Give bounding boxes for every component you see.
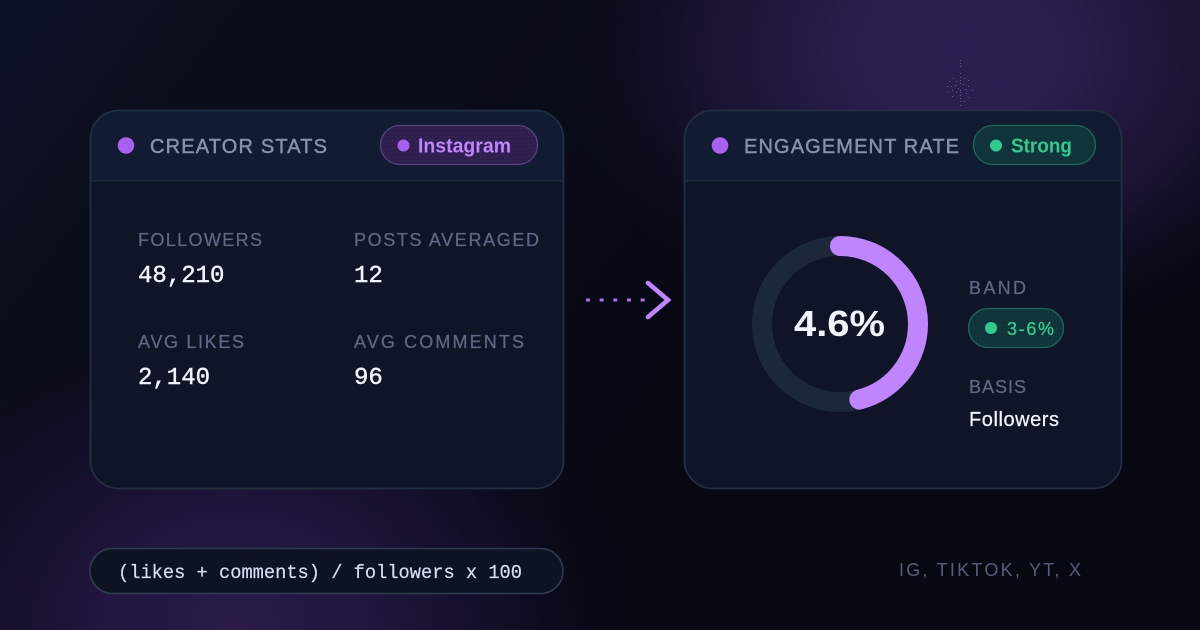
stat: followers bbox=[138, 230, 262, 290]
stat: posts averaged bbox=[354, 230, 539, 290]
stat: avg likes bbox=[138, 332, 244, 392]
icon: dot cluster bbox=[947, 60, 973, 106]
stat: avg comments: 96 bbox=[354, 365, 383, 392]
arrow bbox=[586, 283, 668, 317]
donut value: 4.6% bbox=[794, 303, 885, 344]
icon: header dot bbox=[118, 137, 134, 154]
stat: posts averaged: 12 bbox=[354, 263, 383, 290]
label: basis: BASIS bbox=[969, 377, 1026, 397]
formula pill: (likes + comments) / followers x 100 bbox=[118, 562, 522, 584]
panel: creator stats bbox=[90, 110, 564, 489]
stat: avg likes: AVG LIKES bbox=[138, 332, 244, 352]
stat: followers: 48,210 bbox=[138, 263, 224, 290]
badge: instagram bbox=[380, 126, 538, 164]
value: followers: Followers bbox=[969, 409, 1059, 431]
badge: band range: 3-6% bbox=[1007, 319, 1054, 339]
icon: header dot bbox=[712, 137, 728, 154]
platforms note: IG, TIKTOK, YT, X bbox=[899, 560, 1081, 580]
heading: engagement rate: ENGAGEMENT RATE bbox=[744, 136, 959, 158]
badge: band range bbox=[968, 308, 1064, 348]
badge: instagram: Instagram bbox=[418, 136, 511, 158]
donut chart bbox=[762, 246, 918, 402]
stat: posts averaged: POSTS AVERAGED bbox=[354, 230, 539, 250]
badge: strong bbox=[974, 126, 1096, 164]
stat: avg likes: 2,140 bbox=[138, 365, 210, 392]
stat: avg comments bbox=[354, 332, 524, 392]
stat: followers: FOLLOWERS bbox=[138, 230, 262, 250]
stat: avg comments: AVG COMMENTS bbox=[354, 332, 524, 352]
formula pill bbox=[90, 548, 563, 594]
label: band: BAND bbox=[969, 278, 1026, 298]
panel: engagement rate bbox=[684, 110, 1122, 489]
badge: strong: Strong bbox=[1011, 136, 1072, 158]
heading: creator stats: CREATOR STATS bbox=[150, 136, 327, 158]
